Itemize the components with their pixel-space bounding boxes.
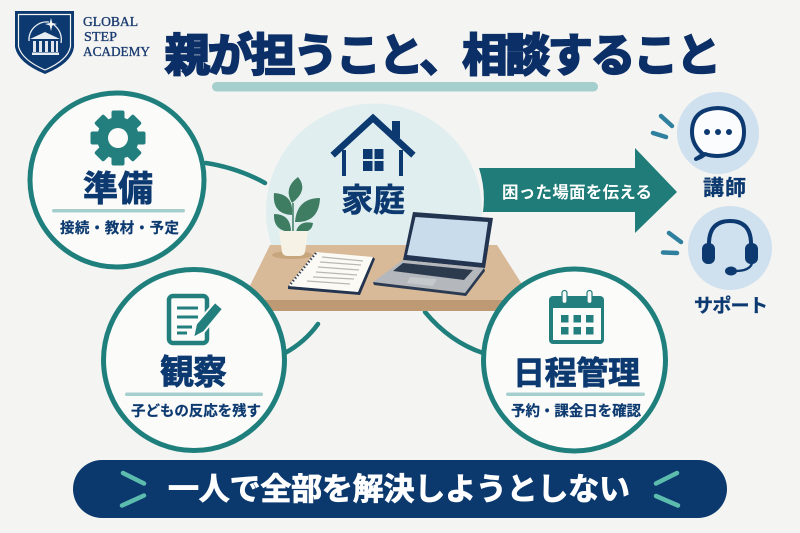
panel: observation: [104, 270, 284, 450]
divider: [52, 209, 185, 212]
logo wordmark: ACADEMY: [83, 44, 150, 59]
icon: gear: [90, 110, 146, 166]
label: teacher: 講師: [703, 177, 746, 200]
connector: preparation to home: [206, 163, 265, 183]
logo wordmark: STEP: [84, 29, 117, 44]
label: support: サポート: [694, 294, 768, 317]
icon: potted plant: [272, 177, 320, 259]
desk: [243, 245, 532, 311]
icon: speech bubble: [677, 92, 759, 174]
subtext: preparation: 接続・教材・予定: [60, 220, 179, 237]
accent ticks: support: [663, 233, 681, 253]
heading: observation: 観察: [160, 354, 227, 392]
connector: schedule to home: [425, 312, 483, 353]
logo: Global Step Academy: [15, 11, 150, 74]
chevron: left: [122, 473, 144, 506]
title: 親が担うこと、相談すること: [165, 30, 721, 81]
heading: preparation: 準備: [83, 170, 153, 209]
divider: [125, 392, 263, 396]
icon: calendar: [549, 290, 604, 344]
icon: laptop: [373, 212, 493, 296]
icon: academy shield: [15, 11, 74, 74]
logo wordmark: [83, 14, 150, 59]
icon: headset: [688, 206, 772, 290]
panel: schedule management: [484, 269, 666, 451]
title underline: [212, 82, 598, 92]
connector: observation to home: [285, 324, 318, 353]
banner: do not try to solve everything alone: [73, 460, 727, 518]
icon: house: [335, 118, 411, 176]
subtext: schedule management: 予約・課金日を確認: [511, 402, 642, 420]
logo wordmark: GLOBAL: [83, 14, 138, 29]
banner text: 一人で全部を解決しようとしない: [168, 472, 630, 507]
home background circle: [266, 104, 482, 247]
chevron: right: [656, 473, 678, 506]
icon: note and pencil: [169, 296, 223, 343]
divider: [506, 392, 645, 396]
panel: preparation: [30, 93, 204, 267]
panel: teacher: [653, 92, 759, 200]
panel: support: [663, 206, 772, 317]
heading: schedule management: 日程管理: [513, 355, 640, 391]
label: home: 家庭: [341, 182, 405, 218]
icon: notebook: [288, 252, 375, 295]
arrow label: 困った場面を伝える: [502, 183, 652, 202]
subtext: observation: 子どもの反応を残す: [131, 402, 261, 420]
accent ticks: teacher: [653, 116, 672, 137]
arrow: tell the teacher about difficulties: [479, 148, 677, 233]
